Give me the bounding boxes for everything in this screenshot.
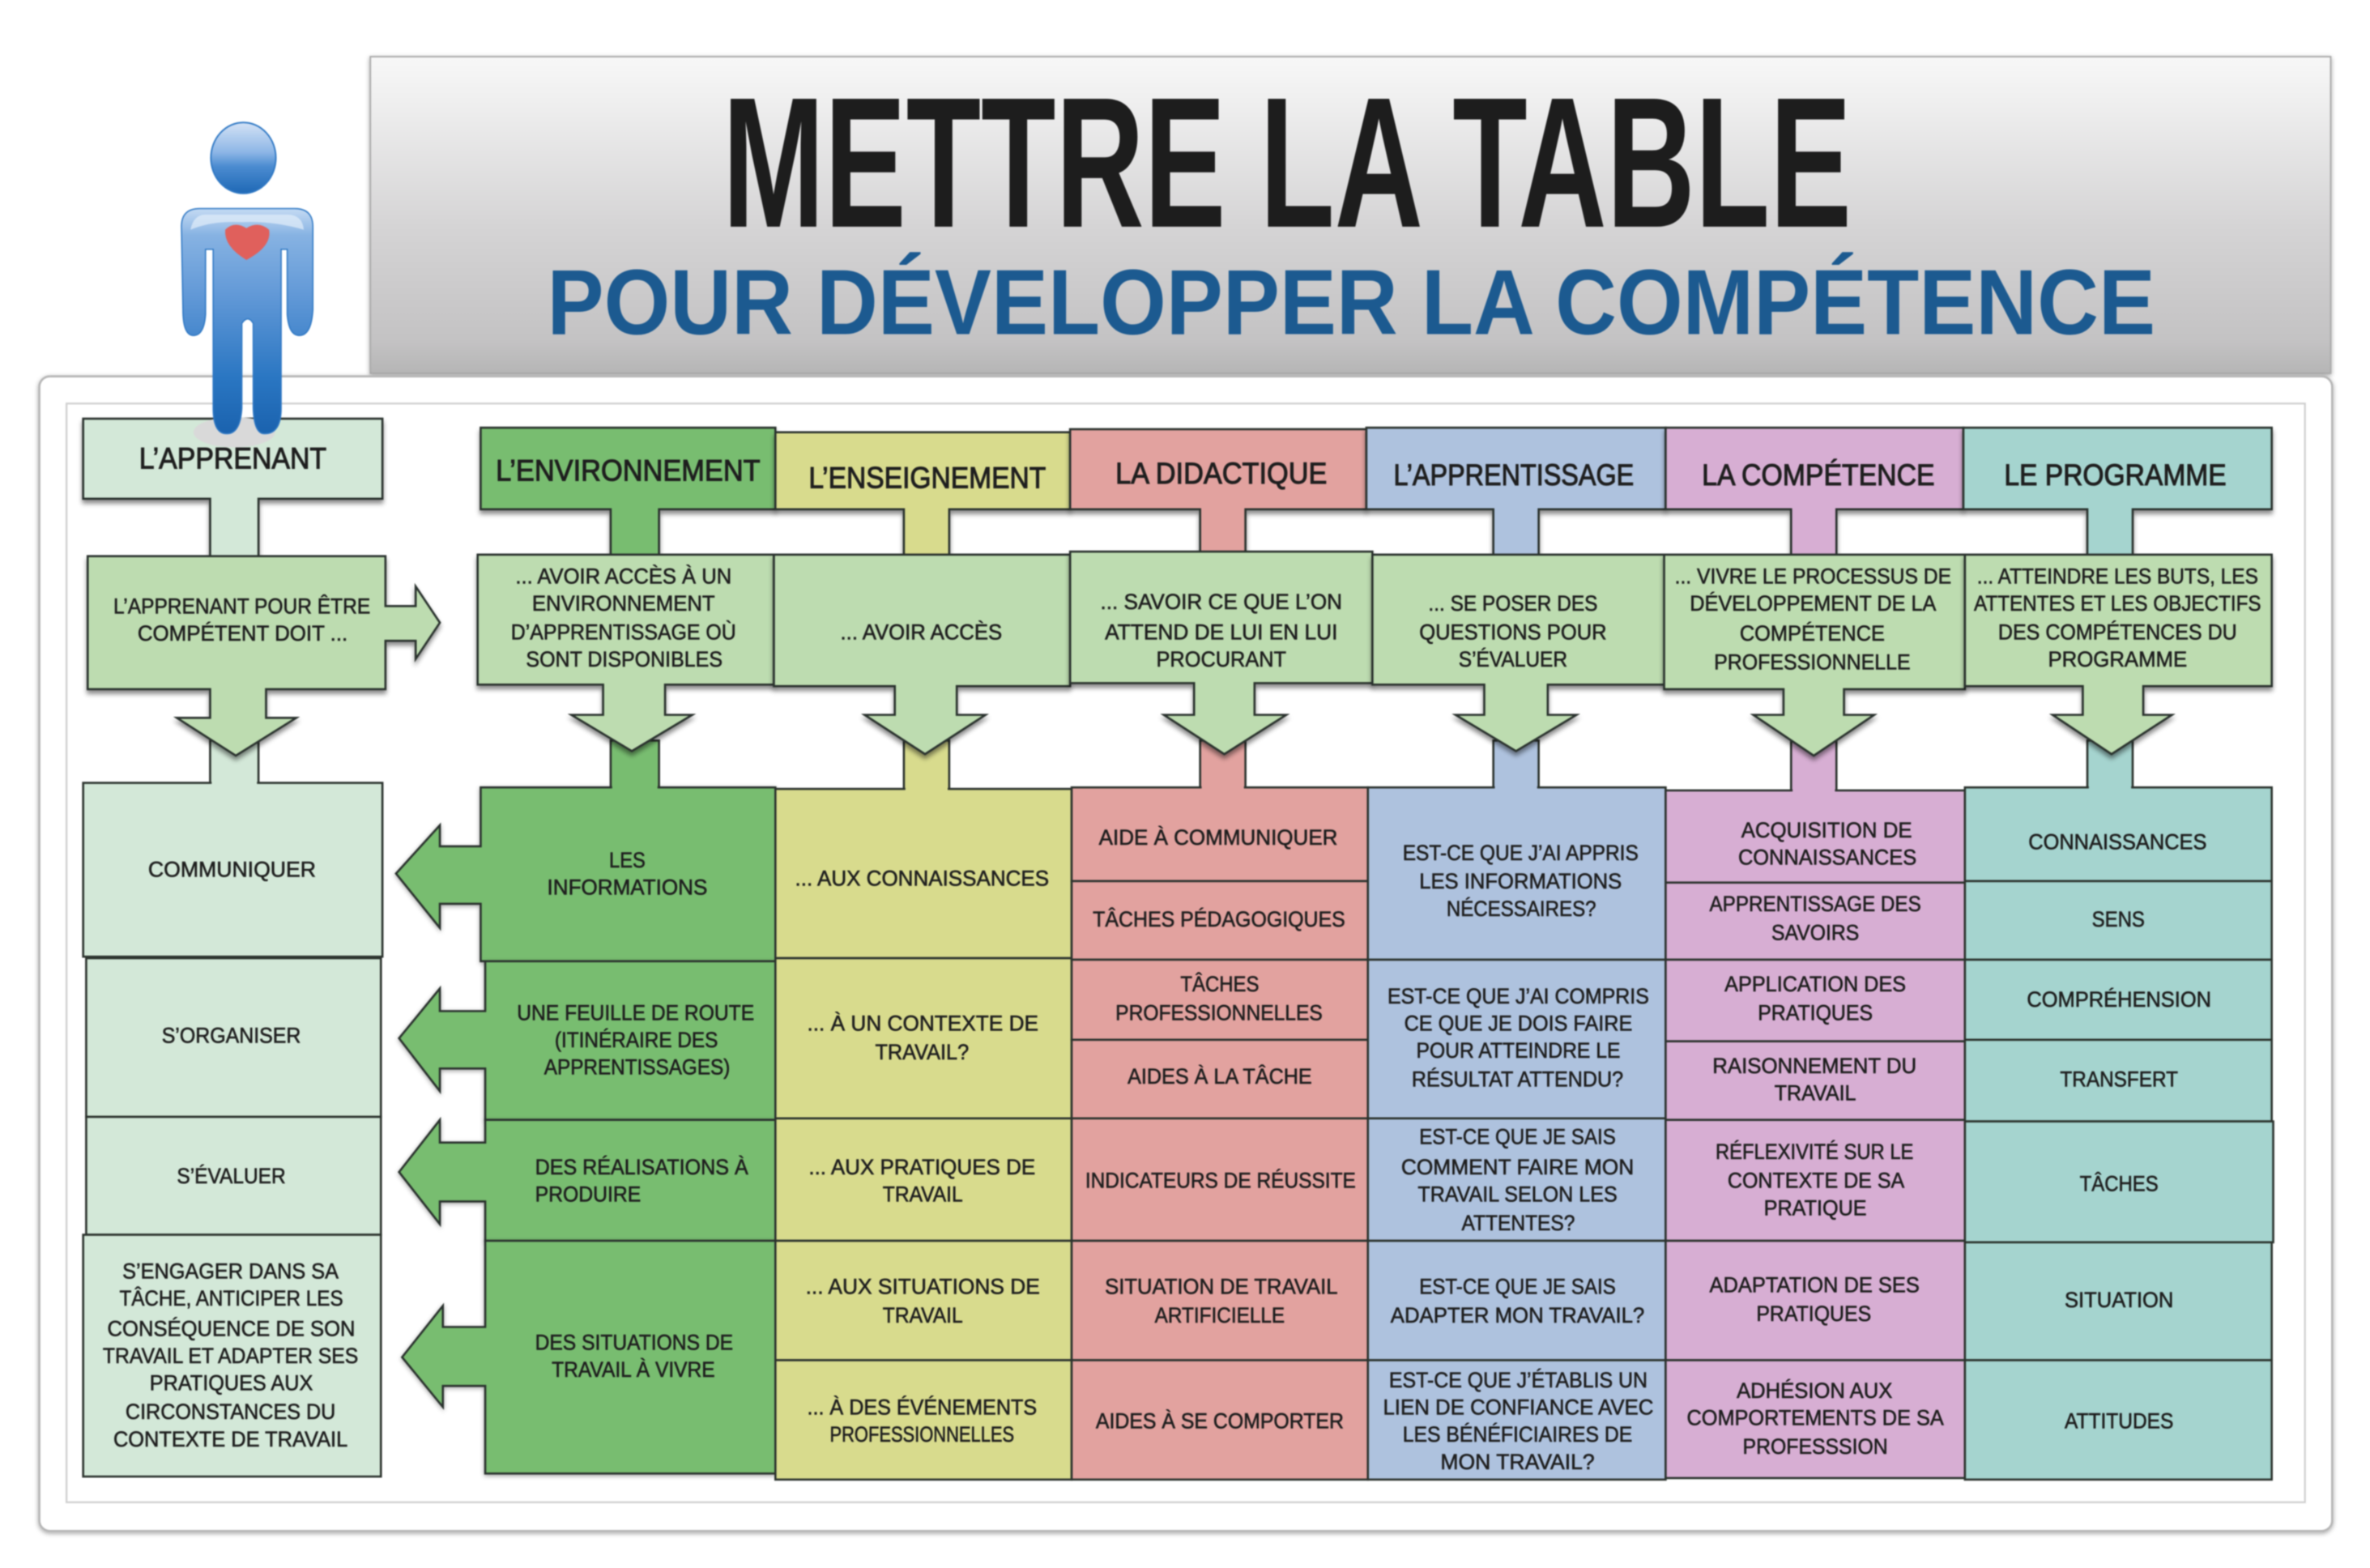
cell: connaissances (1965, 787, 2272, 881)
box with arrow: atteindre les buts: DES COMPÉTENCES DU (1998, 620, 2237, 644)
cell: s'engager: CIRCONSTANCES DU (126, 1400, 335, 1424)
cell: adaptation de ses pratiques (1665, 1241, 1965, 1360)
cell: informations nécessaires: EST-CE QUE J’AI APPRIS (1403, 841, 1639, 865)
cell: résultat attendu: CE QUE JE DOIS FAIRE (1405, 1012, 1632, 1036)
cell: s'engager: TÂCHE, ANTICIPER LES (119, 1286, 343, 1310)
box with arrow: se poser des questions: S’ÉVALUER (1459, 647, 1567, 671)
cell: aide à communiquer (1072, 787, 1368, 881)
cell: connaissances: CONNAISSANCES (2028, 830, 2206, 854)
box with arrow: vivre le processus: ... VIVRE LE PROCESSUS DE (1675, 564, 1951, 588)
cell: feuille de route (399, 961, 775, 1120)
cell: lien de confiance: MON TRAVAIL? (1440, 1450, 1595, 1474)
box with arrow: se poser des questions: ... SE POSER DES (1428, 591, 1597, 616)
cell: attitudes: ATTITUDES (2065, 1408, 2173, 1433)
cell: communiquer: COMMUNIQUER (148, 857, 316, 881)
box with arrows: l'apprenant pour être compétent: L’APPRENANT POUR ÊTRE (113, 594, 370, 619)
heading: l'apprenant: L’APPRENANT (139, 441, 326, 475)
box with arrow: atteindre les buts: PROGRAMME (2048, 647, 2187, 671)
box with arrow: avoir accès à un environnement: ... AVOIR ACCÈS À UN (515, 564, 731, 588)
cell: situations: TRAVAIL À VIVRE (552, 1357, 715, 1382)
box with arrow: atteindre les buts (1965, 555, 2272, 754)
cell: s'engager: PRATIQUES AUX (150, 1371, 313, 1395)
box with arrow: savoir ce que l'on attend: ... SAVOIR CE QUE L’ON (1101, 590, 1342, 614)
cell: feuille de route: (ITINÉRAIRE DES (555, 1028, 718, 1052)
cell: s'organiser: S’ORGANISER (162, 1024, 301, 1048)
heading: la didactique: LA DIDACTIQUE (1115, 456, 1327, 490)
cell: tâches professionnelles: TÂCHES (1180, 972, 1259, 996)
lower stem apprentissage (1494, 740, 1539, 790)
box with arrow: atteindre les buts: ... ATTEINDRE LES BUTS, LES (1977, 564, 2258, 588)
panel: l'apprentissage column (1366, 428, 1665, 1480)
cell: raisonnement du travail: TRAVAIL (1775, 1080, 1856, 1105)
cell: informations nécessaires (1368, 787, 1665, 960)
cell: réalisations: PRODUIRE (535, 1182, 641, 1206)
cell: les informations (396, 787, 775, 961)
box with arrow: avoir accès à un environnement (478, 555, 774, 751)
box with arrow: vivre le processus: COMPÉTENCE (1740, 621, 1885, 646)
cell: tâches (1965, 1122, 2274, 1242)
cell: raisonnement du travail (1665, 1042, 1965, 1120)
box with arrow: atteindre les buts: ATTENTES ET LES OBJECTIFS (1974, 591, 2261, 616)
cell: lien de confiance: LES BÉNÉFICIAIRES DE (1403, 1422, 1632, 1447)
cell: réflexivité (1665, 1120, 1965, 1241)
icon: heart (225, 225, 270, 260)
box with arrow: se poser des questions: QUESTIONS POUR (1419, 620, 1607, 644)
box with arrows: l'apprenant pour être compétent (87, 556, 440, 756)
box with arrow: se poser des questions (1372, 555, 1665, 751)
cell: lien de confiance: LIEN DE CONFIANCE AVEC (1383, 1395, 1653, 1420)
cell: lien de confiance: EST-CE QUE J’ÉTABLIS UN (1389, 1368, 1647, 1392)
lower stem environnement (611, 740, 659, 792)
cell: attitudes (1965, 1360, 2272, 1480)
heading: l'apprentissage: L’APPRENTISSAGE (1394, 458, 1634, 492)
box with arrow: savoir ce que l'on attend (1070, 552, 1372, 754)
cell: situations de travail (775, 1241, 1072, 1360)
lower stem enseignement (904, 740, 949, 792)
cell: contexte de travail (775, 958, 1072, 1118)
cell: adhésion aux comportements: PROFESSSION (1743, 1434, 1888, 1459)
cell: s'engager: CONTEXTE DE TRAVAIL (113, 1427, 347, 1451)
cell: adapter mon travail (1368, 1241, 1665, 1360)
box with arrow: savoir ce que l'on attend: PROCURANT (1157, 647, 1286, 671)
cell: résultat attendu (1368, 960, 1665, 1118)
cell: situations (402, 1241, 775, 1473)
cell: sens (1965, 881, 2272, 960)
panel: l'enseignement column (774, 432, 1072, 1480)
subtitle: POUR DÉVELOPPER LA COMPÉTENCE (548, 251, 2155, 354)
cell: apprentissage des savoirs: APPRENTISSAGE DES (1710, 892, 1921, 916)
cell: tâches professionnelles (1072, 960, 1368, 1040)
cell: résultat attendu: RÉSULTAT ATTENDU? (1412, 1067, 1623, 1092)
cell: s'engager: S’ENGAGER DANS SA (122, 1259, 339, 1284)
heading: la compétence (1665, 428, 1963, 558)
cell: pratiques de travail (775, 1118, 1072, 1241)
panel: la didactique column (1070, 429, 1372, 1480)
cell: événements professionnels (775, 1360, 1072, 1480)
cell: situation: SITUATION (2065, 1288, 2173, 1312)
cell: aide à communiquer: AIDE À COMMUNIQUER (1099, 825, 1337, 850)
cell: comment faire mon travail: TRAVAIL SELON LES (1417, 1182, 1618, 1206)
cell: événements professionnels: PROFESSIONNELLES (829, 1422, 1014, 1447)
box with arrow: avoir accès (774, 555, 1070, 754)
cell: comment faire mon travail: EST-CE QUE JE SAIS (1419, 1125, 1616, 1149)
cell: adapter mon travail: EST-CE QUE JE SAIS (1419, 1274, 1616, 1298)
cell: adhésion aux comportements: COMPORTEMENTS DE SA (1687, 1406, 1944, 1430)
cell: situation artificielle: ARTIFICIELLE (1155, 1303, 1285, 1327)
heading: le programme (1963, 428, 2272, 558)
cell: s'évaluer: S’ÉVALUER (177, 1164, 286, 1188)
cell: aides à la tâche: AIDES À LA TÂCHE (1127, 1064, 1312, 1089)
cell: pratiques de travail: ... AUX PRATIQUES DE (808, 1155, 1035, 1179)
title banner (370, 57, 2330, 373)
cell: s'évaluer (86, 1117, 381, 1235)
cell: tâches pédagogiques: TÂCHES PÉDAGOGIQUES (1093, 907, 1345, 931)
heading: la compétence: LA COMPÉTENCE (1702, 458, 1935, 492)
cell: compréhension: COMPRÉHENSION (2027, 987, 2211, 1012)
cell: connaissances (775, 789, 1072, 958)
cell: tâches: TÂCHES (2080, 1171, 2159, 1195)
cell: situations de travail: TRAVAIL (883, 1303, 963, 1327)
icon: person with heart (181, 122, 313, 447)
cell: acquisition de connaissances: ACQUISITION DE (1741, 818, 1912, 842)
cell: événements professionnels: ... À DES ÉVÉNEMENTS (807, 1395, 1037, 1420)
cell: apprentissage des savoirs (1665, 883, 1965, 960)
cell: réflexivité: CONTEXTE DE SA (1728, 1169, 1904, 1193)
cell: adhésion aux comportements (1665, 1360, 1965, 1478)
cell: application des pratiques (1665, 960, 1965, 1042)
cell: réalisations (399, 1120, 775, 1241)
box with arrow: avoir accès: ... AVOIR ACCÈS (841, 620, 1002, 644)
panel: l'environnement column (396, 428, 775, 1473)
box with arrow: savoir ce que l'on attend: ATTEND DE LUI EN LUI (1105, 620, 1337, 644)
cell: résultat attendu: EST-CE QUE J’AI COMPRIS (1387, 984, 1649, 1008)
box with arrows: l'apprenant pour être compétent: COMPÉTENT DOIT ... (138, 621, 347, 646)
cell: tâches professionnelles: PROFESSIONNELLES (1115, 1001, 1323, 1025)
cell: transfert (1965, 1040, 2272, 1122)
cell: réflexivité: PRATIQUE (1764, 1195, 1867, 1220)
cell: aides à la tâche (1072, 1040, 1368, 1118)
outer frame (40, 377, 2332, 1531)
box with arrow: avoir accès à un environnement: D’APPRENTISSAGE OÙ (511, 620, 736, 644)
cell: comment faire mon travail: COMMENT FAIRE MON (1401, 1155, 1634, 1179)
cell: lien de confiance (1368, 1360, 1665, 1480)
cell: sens: SENS (2092, 907, 2145, 931)
box with arrow: avoir accès à un environnement: SONT DISPONIBLES (526, 647, 723, 671)
cell: feuille de route: UNE FEUILLE DE ROUTE (517, 1001, 754, 1025)
heading: le programme: LE PROGRAMME (2004, 458, 2227, 492)
cell: adhésion aux comportements: ADHÉSION AUX (1737, 1378, 1892, 1403)
heading: l'environnement: L’ENVIRONNEMENT (496, 453, 761, 487)
cell: acquisition de connaissances: CONNAISSANCES (1738, 845, 1916, 869)
cell: adapter mon travail: ADAPTER MON TRAVAIL? (1391, 1303, 1644, 1327)
heading: l'enseignement: L’ENSEIGNEMENT (808, 461, 1046, 495)
cell: indicateurs de réussite (1072, 1118, 1368, 1241)
cell: pratiques de travail: TRAVAIL (883, 1182, 963, 1206)
cell: informations nécessaires: NÉCESSAIRES? (1447, 897, 1596, 921)
cell: les informations: LES (609, 848, 646, 872)
cell: transfert: TRANSFERT (2060, 1067, 2178, 1092)
panel: la compétence column (1665, 428, 1965, 1478)
box with arrow: avoir accès à un environnement: ENVIRONNEMENT (532, 591, 715, 616)
cell: adaptation de ses pratiques: ADAPTATION DE SES (1710, 1272, 1920, 1297)
cell: s'engager: TRAVAIL ET ADAPTER SES (103, 1344, 358, 1368)
cell: informations nécessaires: LES INFORMATIONS (1419, 869, 1622, 893)
cell: situation artificielle: SITUATION DE TRAVAIL (1105, 1274, 1337, 1298)
cell: feuille de route: APPRENTISSAGES) (544, 1055, 730, 1080)
heading: l'enseignement (775, 432, 1070, 558)
cell: acquisition de connaissances (1665, 790, 1965, 883)
cell: contexte de travail: TRAVAIL? (875, 1040, 969, 1064)
lower stem apprenant (210, 740, 258, 786)
heading: l'apprentissage (1366, 428, 1665, 558)
cell: tâches pédagogiques (1072, 881, 1368, 960)
box with arrow: vivre le processus: DÉVELOPPEMENT DE LA (1690, 591, 1937, 616)
panel: l'apprenant column (83, 419, 440, 1476)
cell: comment faire mon travail: ATTENTES? (1461, 1211, 1575, 1235)
cell: réflexivité: RÉFLEXIVITÉ SUR LE (1716, 1140, 1913, 1164)
cell: communiquer (83, 783, 382, 957)
cell: situations: DES SITUATIONS DE (535, 1330, 733, 1354)
lower stem compétence (1791, 740, 1836, 794)
cell: résultat attendu: POUR ATTEINDRE LE (1417, 1038, 1620, 1063)
cell: apprentissage des savoirs: SAVOIRS (1771, 921, 1859, 945)
cell: situation artificielle (1072, 1241, 1368, 1360)
cell: compréhension (1965, 960, 2272, 1040)
box with arrow: vivre le processus: PROFESSIONNELLE (1714, 650, 1911, 675)
heading: la didactique (1070, 429, 1366, 555)
cell: application des pratiques: APPLICATION DES (1724, 972, 1906, 996)
cell: s'engager: CONSÉQUENCE DE SON (108, 1317, 356, 1341)
cell: aides à se comporter (1072, 1360, 1368, 1480)
cell: les informations: INFORMATIONS (548, 876, 707, 900)
cell: s'organiser (86, 958, 381, 1117)
box with arrow: vivre le processus (1665, 555, 1965, 756)
cell: situations de travail: ... AUX SITUATIONS DE (806, 1274, 1040, 1298)
cell: aides à se comporter: AIDES À SE COMPORTER (1096, 1408, 1344, 1433)
heading: l'apprenant (83, 419, 382, 559)
cell: contexte de travail: ... À UN CONTEXTE DE (807, 1012, 1038, 1036)
heading: l'environnement (480, 428, 775, 558)
cell: raisonnement du travail: RAISONNEMENT DU (1712, 1054, 1916, 1078)
cell: application des pratiques: PRATIQUES (1758, 1001, 1873, 1025)
cell: indicateurs de réussite: INDICATEURS DE RÉUSSITE (1085, 1169, 1356, 1193)
cell: adaptation de ses pratiques: PRATIQUES (1756, 1302, 1871, 1326)
cell: connaissances: ... AUX CONNAISSANCES (795, 866, 1049, 890)
lower stem didactique (1200, 740, 1246, 790)
cell: s'engager (83, 1235, 381, 1476)
cell: situation (1965, 1242, 2272, 1360)
lower stem programme (2087, 740, 2133, 790)
cell: réalisations: DES RÉALISATIONS À (535, 1155, 748, 1179)
cell: comment faire mon travail (1368, 1118, 1665, 1241)
panel: le programme column (1963, 428, 2274, 1480)
